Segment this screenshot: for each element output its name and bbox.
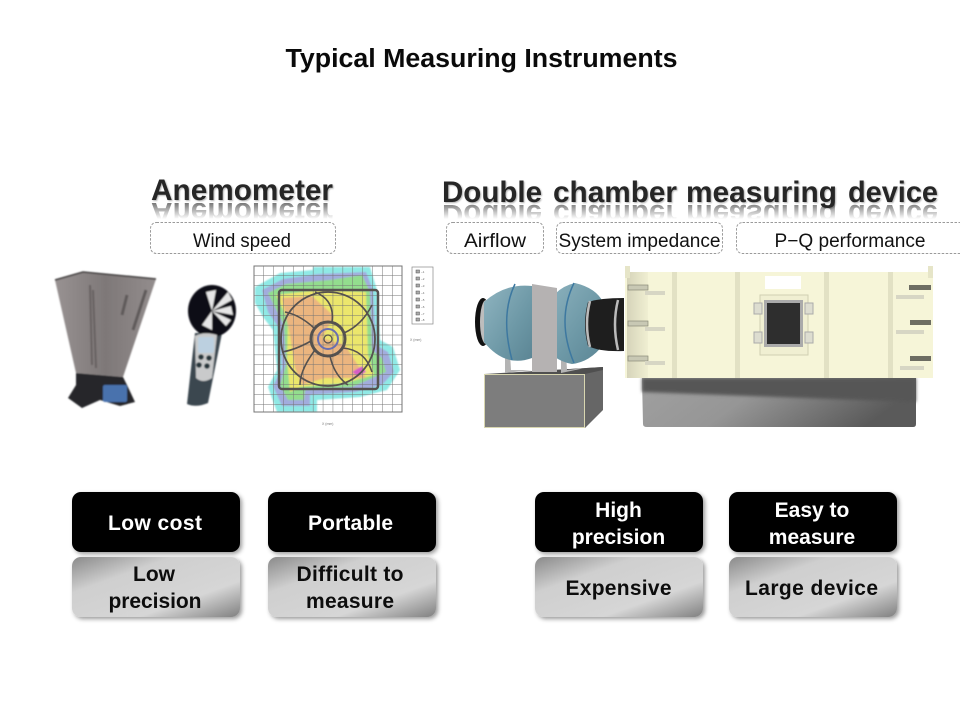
chart legend (412, 267, 433, 324)
chart: airflow contour map over fan (254, 266, 433, 426)
stand (484, 353, 603, 428)
black duct (585, 298, 624, 351)
card: low precision: precision (108, 590, 202, 613)
chart legend: ~5 (421, 298, 425, 302)
heading: Double chamber measuring device (444, 180, 939, 218)
icon: handheld vane anemometer (187, 285, 236, 406)
mounting bolts (628, 285, 931, 370)
card: high precision: High (595, 499, 642, 522)
chart legend: ~7 (421, 312, 425, 316)
card: easy to measure: Easy to (775, 499, 849, 522)
card: expensive: Expensive (566, 577, 672, 600)
heading: Anemometer: Anemometer (151, 174, 334, 207)
card: low precision (72, 557, 240, 617)
chamber body (625, 266, 933, 378)
tag: system impedance (556, 222, 722, 254)
card: large device (729, 557, 897, 617)
card: high precision (535, 492, 703, 552)
heading: Double chamber measuring device: Double (442, 176, 542, 209)
heading: Double chamber measuring device: chamber (553, 176, 678, 209)
card: high precision: precision (572, 526, 665, 549)
heading: Double chamber measuring device: measuring (686, 198, 837, 231)
heading: Anemometer: Anemometer (151, 196, 334, 229)
tag: P-Q performance (736, 222, 960, 254)
card: difficult to measure: Difficult to (296, 563, 404, 586)
heading: Double chamber measuring device: measuring (686, 176, 837, 209)
chart legend: ~3 (421, 284, 425, 288)
card: easy to measure (729, 492, 897, 552)
icon: balometer flow hood (55, 272, 156, 408)
card: easy to measure: measure (769, 526, 855, 549)
heading: Double chamber measuring device: device (848, 176, 938, 209)
chart legend: ~6 (421, 305, 425, 309)
tag: wind speed: Wind speed (193, 231, 291, 252)
card: expensive (535, 557, 703, 617)
left duct ring (475, 298, 492, 346)
tag: airflow (446, 222, 544, 254)
card: large device: Large device (745, 577, 878, 600)
chart legend: ~1 (421, 270, 425, 274)
chart legend: ~8 (421, 318, 425, 322)
card: difficult to measure (268, 557, 436, 617)
chart legend: ~4 (421, 291, 425, 295)
axis labels (322, 338, 421, 426)
card: difficult to measure: measure (306, 590, 394, 613)
pedestal (642, 378, 916, 427)
chart legend: ~2 (421, 277, 425, 281)
card: low cost: Low cost (108, 512, 202, 535)
tag: P-Q performance: P−Q performance (774, 231, 926, 252)
axis labels: X (mm) (322, 422, 333, 426)
tag: system impedance: System impedance (558, 231, 720, 252)
card: low precision: Low (133, 563, 176, 586)
card: portable (268, 492, 436, 552)
illustration: double chamber device (475, 266, 933, 428)
heading: Double chamber measuring device: Double (442, 198, 542, 231)
title: Typical Measuring Instruments (286, 45, 678, 73)
heading: Double chamber measuring device: chamber (553, 198, 678, 231)
fan outline (279, 290, 378, 389)
heading: Anemometer (152, 180, 334, 218)
heading: Double chamber measuring device: device (848, 198, 938, 231)
card: portable: Portable (308, 512, 393, 535)
chamber balls (484, 283, 603, 372)
axis labels: X (mm) (410, 338, 421, 342)
tag: wind speed (150, 222, 336, 254)
inspection window (754, 295, 813, 355)
card: low cost (72, 492, 240, 552)
tag: airflow: Airflow (464, 231, 526, 252)
